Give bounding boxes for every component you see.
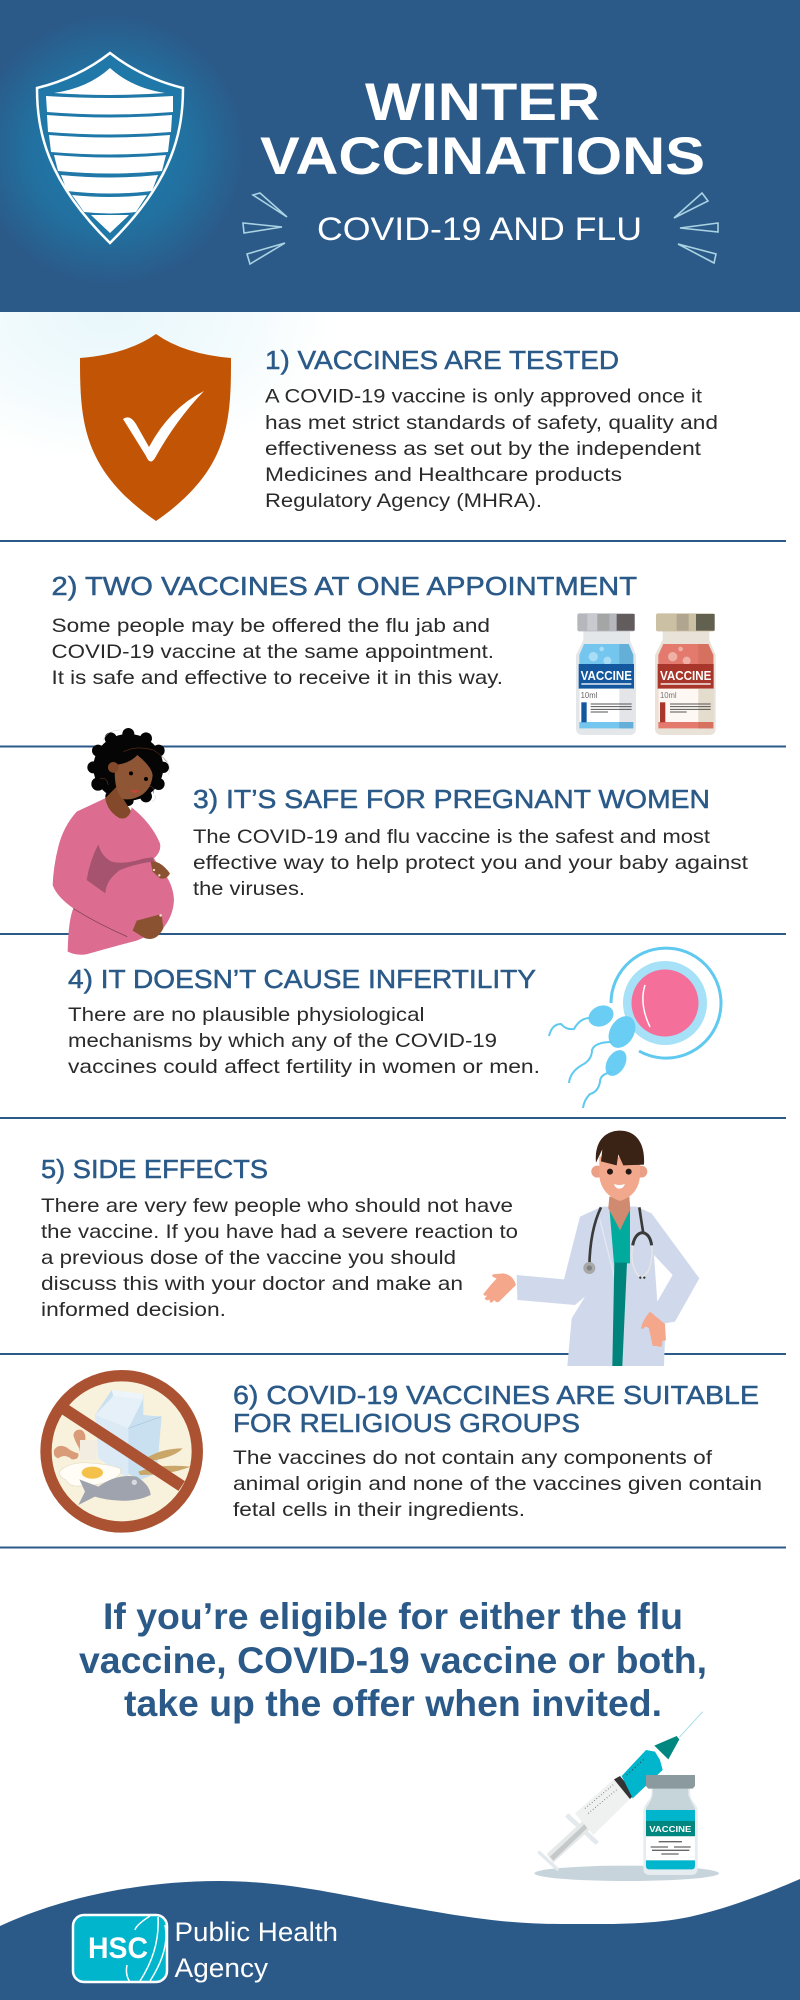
icon: egg and sperm (549, 948, 721, 1108)
panel: 3 pregnant women (193, 784, 749, 900)
panel: header (0, 0, 800, 312)
vial: VACCINE (649, 1824, 692, 1834)
text block 1 (265, 386, 718, 512)
text block 6: fetal cells in their ingredients. (233, 1499, 525, 1521)
text block 1: has met strict standards of safety, quality and (265, 412, 718, 434)
panel: footer wave (0, 1879, 800, 2000)
heading 2: 2) TWO VACCINES AT ONE APPOINTMENT (52, 571, 637, 601)
title (260, 73, 705, 186)
scrubs (609, 1207, 630, 1263)
text block 2: COVID-19 vaccine at the same appointment. (52, 641, 494, 663)
callout (79, 1596, 707, 1724)
text block 2 (52, 615, 503, 689)
panel: 1 vaccines are tested (80, 334, 718, 521)
heading 3: 3) IT’S SAFE FOR PREGNANT WOMEN (193, 784, 710, 814)
heading 1: 1) VACCINES ARE TESTED (265, 345, 619, 375)
icon: striped shield (37, 53, 183, 243)
icon: pregnant woman (53, 728, 174, 955)
prohibition sign (46, 1376, 197, 1527)
logo text: Public Health Agency (174, 1917, 338, 1983)
text block 1: Regulatory Agency (MHRA). (265, 490, 542, 512)
heading 5: 5) SIDE EFFECTS (41, 1154, 268, 1184)
logo: HSC: HSC (88, 1932, 148, 1965)
title: WINTER (365, 73, 600, 132)
peanuts (73, 1430, 89, 1455)
panel: 4 infertility (68, 948, 721, 1108)
heading 6 (233, 1380, 759, 1438)
text block 6: animal origin and none of the vaccines given contain (233, 1473, 762, 1495)
logo text: Public Health Agency: Agency (174, 1953, 269, 1983)
icon: prohibited animal products (46, 1376, 197, 1527)
text block 3: effective way to help protect you and your baby against (193, 852, 749, 874)
syringe (538, 1712, 703, 1870)
text block 3: The COVID-19 and flu vaccine is the safest and most (193, 826, 711, 848)
egg (59, 1463, 121, 1486)
body (53, 798, 174, 955)
text block 5 (41, 1195, 518, 1321)
vial (643, 1775, 698, 1875)
panel: 5 side effects (41, 1154, 518, 1321)
hands (151, 861, 170, 879)
text block 4: mechanisms by which any of the COVID-19 (68, 1030, 497, 1052)
icon: blue vial: 10ml (581, 691, 598, 700)
subtitle: COVID-19 AND FLU (317, 211, 642, 247)
icon: blue vial (576, 613, 636, 735)
logo: HSC (73, 1915, 167, 1982)
callout: If you’re eligible for either the flu (103, 1596, 683, 1637)
text block 5: informed decision. (41, 1299, 226, 1321)
text block 5: a previous dose of the vaccine you should (41, 1247, 456, 1269)
callout: take up the offer when invited. (124, 1683, 662, 1724)
text block 1: A COVID-19 vaccine is only approved once it (265, 386, 703, 408)
head (591, 1166, 603, 1178)
text block 4: There are no plausible physiological (68, 1004, 424, 1026)
icon: red vial: 10ml (660, 691, 677, 700)
text block 3 (193, 826, 749, 900)
icon: two vaccine vials (576, 613, 716, 735)
panel: 6 religious groups (46, 1376, 762, 1527)
icon: right burst (674, 193, 718, 263)
icon: left burst (243, 193, 287, 264)
text block 1: Medicines and Healthcare products (265, 464, 622, 486)
callout: vaccine, COVID-19 vaccine or both, (79, 1640, 707, 1681)
hair (87, 728, 169, 806)
text block 1: effectiveness as set out by the independent (265, 438, 702, 460)
text block 5: There are very few people who should not have (41, 1195, 513, 1217)
text block 6: The vaccines do not contain any components of (233, 1447, 713, 1469)
text block 6 (233, 1447, 762, 1521)
logo text: Public Health Agency: Public Health (174, 1917, 338, 1947)
heading 4: 4) IT DOESN’T CAUSE INFERTILITY (68, 964, 536, 994)
text block 4: vaccines could affect fertility in women or men. (68, 1056, 540, 1078)
fish (78, 1476, 151, 1505)
coat (517, 1207, 699, 1366)
text block 2: Some people may be offered the flu jab and (52, 615, 490, 637)
text block 5: the vaccine. If you have had a severe reaction to (41, 1221, 518, 1243)
icon: red vial: VACCINE (660, 668, 711, 683)
heading 6: 6) COVID-19 VACCINES ARE SUITABLE (233, 1380, 759, 1410)
title: VACCINATIONS (260, 127, 705, 186)
milk carton (95, 1390, 162, 1480)
text block 4 (68, 1004, 540, 1078)
wheat (138, 1448, 191, 1475)
text block 2: It is safe and effective to receive it in this way. (52, 667, 503, 689)
stethoscope (589, 1207, 652, 1277)
icon: syringe and vial (534, 1712, 719, 1881)
heading 6: FOR RELIGIOUS GROUPS (233, 1408, 580, 1438)
icon: red vial (655, 613, 716, 735)
icon: blue vial: VACCINE (581, 668, 632, 683)
hands (483, 1273, 516, 1303)
icon: orange shield with tick (80, 334, 231, 521)
icon: doctor (483, 1131, 699, 1366)
text block 3: the viruses. (193, 878, 305, 900)
panel: 2 two vaccines (52, 571, 716, 735)
text block 5: discuss this with your doctor and make an (41, 1273, 463, 1295)
